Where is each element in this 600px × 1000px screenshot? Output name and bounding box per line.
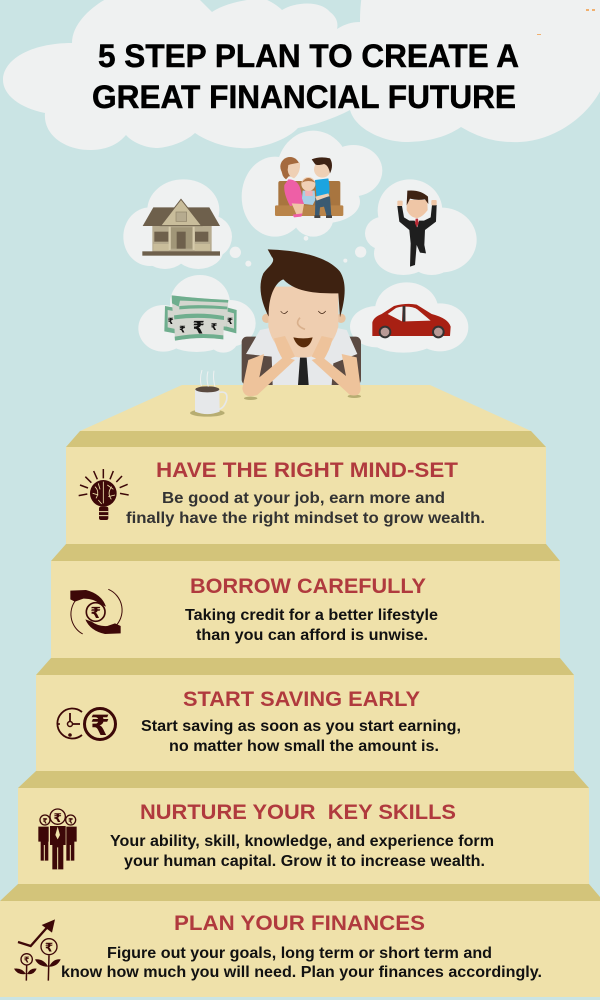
description: Start saving as soon as you start earning,	[141, 718, 461, 735]
icon: man in suit	[397, 190, 437, 267]
icon: brain bulb	[79, 469, 129, 520]
icon: coffee cup	[190, 370, 227, 417]
step 2: borrow carefully	[51, 544, 560, 658]
icon: rupee notes: ₹	[211, 322, 218, 333]
icon: growing rupee plants	[14, 919, 61, 981]
icon: people with rupee heads: ₹	[68, 816, 73, 825]
thought dots	[230, 236, 366, 267]
title clouds	[3, 0, 600, 150]
icon: rupee notes: ₹	[179, 325, 186, 336]
thought cloud: money	[138, 275, 256, 353]
thought bubbles and dreams	[123, 131, 477, 417]
title	[92, 38, 519, 115]
icon: people with rupee heads: ₹	[53, 811, 62, 825]
description	[141, 718, 461, 755]
icon: clock and rupee	[57, 708, 116, 742]
description: Figure out your goals, long term or short term and	[107, 945, 492, 962]
icon: hands holding rupee: ₹	[90, 604, 101, 622]
icon: people with rupee heads	[38, 809, 77, 869]
step 4: nurture your key skills	[18, 771, 589, 884]
step 5: plan your finances	[0, 884, 600, 997]
thought cloud: success man	[365, 179, 477, 275]
heading: HAVE THE RIGHT MIND-SET	[156, 459, 458, 482]
description: Be good at your job, earn more and	[162, 490, 445, 507]
table top	[80, 385, 531, 431]
icon: rupee notes: ₹	[193, 319, 205, 339]
icon: clock and rupee: ₹	[90, 709, 110, 742]
icon: rupee notes: ₹	[227, 317, 233, 327]
description: know how much you will need. Plan your finances accordingly.	[61, 964, 542, 981]
dreaming man at desk	[242, 249, 361, 400]
description	[185, 607, 438, 644]
icon: rupee notes: ₹	[168, 317, 174, 327]
description	[126, 490, 485, 527]
icon: hands holding rupee	[70, 589, 122, 634]
description: no matter how small the amount is.	[169, 738, 439, 755]
heading: NURTURE YOUR KEY SKILLS	[140, 801, 456, 824]
icon: house	[142, 199, 220, 256]
title: 5 STEP PLAN TO CREATE A	[98, 38, 519, 74]
step 3: start saving early	[36, 658, 574, 771]
icon: growing rupee plants: ₹	[45, 941, 53, 955]
icon: growing rupee plants: ₹	[24, 956, 30, 965]
heading: PLAN YOUR FINANCES	[174, 912, 425, 935]
step 1: have the right mind-set	[66, 431, 546, 544]
heading: BORROW CAREFULLY	[190, 575, 426, 598]
thought cloud: family	[242, 131, 382, 237]
description: your human capital. Grow it to increase wealth.	[124, 853, 485, 870]
icon: family on sofa	[275, 157, 343, 218]
description	[61, 945, 542, 981]
title: GREAT FINANCIAL FUTURE	[92, 79, 516, 115]
icon: people with rupee heads: ₹	[42, 816, 48, 825]
thought cloud: house	[123, 179, 232, 269]
description: Taking credit for a better lifestyle	[185, 607, 438, 624]
heading: START SAVING EARLY	[183, 688, 420, 711]
description: than you can afford is unwise.	[196, 627, 428, 644]
description	[110, 833, 494, 870]
icon: red car	[372, 304, 451, 338]
thought cloud: car	[350, 282, 468, 353]
description: finally have the right mindset to grow wealth.	[126, 510, 485, 527]
icon: rupee notes	[164, 295, 237, 341]
description: Your ability, skill, knowledge, and experience form	[110, 833, 494, 850]
